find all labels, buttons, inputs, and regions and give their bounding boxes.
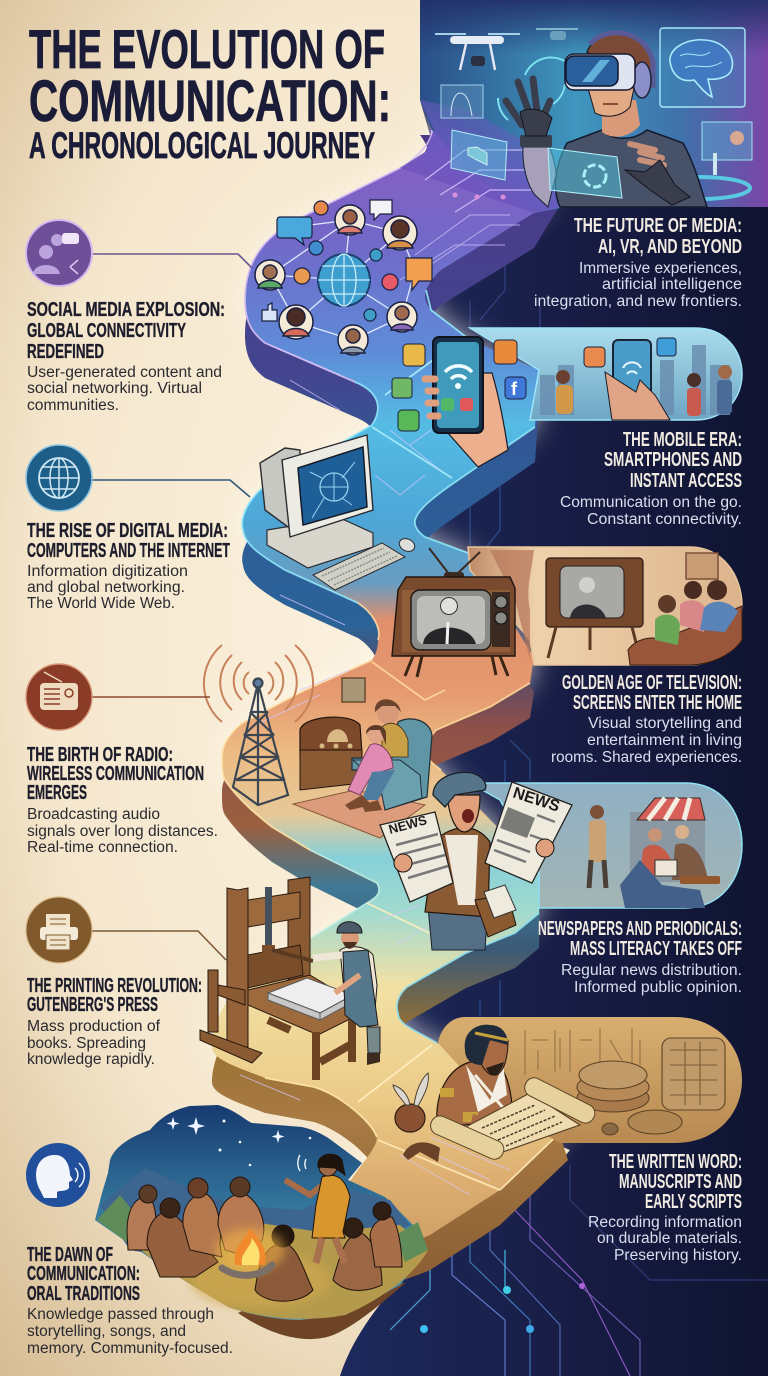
rug — [293, 790, 425, 838]
text: future of media — [534, 215, 742, 310]
ribbon side wall — [212, 135, 568, 1290]
text: birth of radio — [27, 744, 218, 856]
text: birth of radio: THE BIRTH OF RADIO: — [27, 744, 173, 766]
text: social media explosion: SOCIAL MEDIA EXPLOSION: — [27, 299, 225, 321]
chat bubbles — [262, 200, 432, 321]
text: dawn of communication: Knowledge passed through — [27, 1306, 214, 1323]
hologram panels — [441, 58, 752, 199]
app icons — [392, 340, 526, 431]
icon: social media — [26, 220, 92, 286]
left arm — [523, 147, 556, 207]
dark circuit background — [340, 0, 768, 1376]
keyboard — [313, 543, 405, 590]
text: social media explosion: REDEFINED — [27, 341, 104, 363]
text: written word: Preserving history. — [614, 1247, 742, 1264]
avatars — [255, 205, 417, 355]
text: mobile era: Constant connectivity. — [587, 511, 742, 528]
face — [447, 795, 480, 832]
panel: future of media VR scene — [400, 0, 768, 213]
sandy ground — [110, 1220, 428, 1319]
tablet and right hand — [548, 148, 622, 198]
curtain — [490, 550, 534, 660]
glove hand — [506, 79, 552, 136]
text: written word: on durable materials. — [597, 1230, 742, 1247]
text: social media explosion: GLOBAL CONNECTIVITY — [27, 320, 186, 342]
text: rise of digital media — [27, 520, 230, 612]
text: dawn of communication: ORAL TRADITIONS — [27, 1283, 140, 1305]
text: future of media: Immersive experiences, — [579, 260, 742, 277]
icon: globe — [318, 254, 370, 306]
icon: speaking head — [26, 1143, 90, 1207]
right newspaper — [485, 782, 572, 883]
mouse — [397, 536, 417, 554]
scene: printing press — [200, 877, 380, 1080]
desktop base — [267, 518, 373, 568]
neck and face — [602, 100, 640, 137]
press frame — [200, 877, 310, 1063]
text: printing revolution: THE PRINTING REVOLUTION: — [27, 975, 202, 997]
text: printing revolution: books. Spreading — [27, 1035, 146, 1052]
text: birth of radio: signals over long distances. — [27, 823, 218, 840]
monitor screen — [298, 447, 367, 525]
text: newspapers and periodicals: Regular news distribution. — [561, 962, 742, 979]
leader lines — [92, 254, 252, 960]
scribe figure — [437, 1025, 512, 1125]
hieroglyph wall — [525, 1028, 640, 1075]
retro television — [392, 548, 515, 677]
radio tower — [233, 678, 288, 805]
living-room TV — [546, 558, 643, 658]
circuit traces lower right — [390, 240, 768, 1376]
torso — [556, 130, 707, 207]
text: social media explosion: communities. — [27, 397, 119, 414]
fire — [215, 1228, 285, 1275]
text: birth of radio: Broadcasting audio — [27, 806, 160, 823]
ink pot and quill — [393, 1073, 440, 1162]
storyteller — [285, 1154, 350, 1263]
press screw and lever — [262, 887, 313, 961]
ribbon circuit marks — [240, 215, 520, 1195]
scene: radio tower and listeners — [204, 645, 432, 838]
icon: hologram brain — [660, 28, 745, 107]
text: rise of digital media: Information digitization — [27, 563, 188, 580]
second phone in hand — [605, 340, 670, 420]
radio wave arcs — [204, 645, 313, 722]
text: mobile era — [560, 429, 742, 528]
text: mobile era: Communication on the go. — [560, 494, 742, 511]
text: social media explosion: social networking. Virtual — [27, 380, 202, 397]
icon: radio — [26, 664, 92, 730]
icon: digital globe — [26, 445, 92, 511]
panel: mobile era scene — [392, 328, 742, 467]
winding ribbon timeline — [212, 100, 568, 1290]
text: future of media: integration, and new frontiers. — [534, 293, 742, 310]
satchel — [475, 895, 516, 937]
text: dawn of communication: storytelling, songs, and — [27, 1323, 186, 1340]
glowing ribbon edges — [222, 130, 568, 1190]
living-room capsule — [468, 547, 742, 665]
hands — [394, 854, 412, 872]
right newspaper: NEWS — [511, 785, 562, 816]
text: golden age of television — [551, 672, 742, 766]
framed picture — [342, 678, 365, 702]
text: rise of digital media: COMPUTERS AND THE INTERNET — [27, 540, 230, 562]
text: written word — [588, 1151, 742, 1264]
scene: desktop computer — [260, 435, 417, 590]
grass tufts — [97, 1195, 428, 1262]
app icons: f — [511, 379, 518, 399]
text: dawn of communication: memory. Community-focused. — [27, 1340, 233, 1357]
scene: dawn campfire — [95, 1105, 428, 1339]
icon: printer — [26, 897, 92, 963]
text: golden age of television: entertainment in living — [587, 732, 742, 749]
text: birth of radio: WIRELESS COMMUNICATION — [27, 763, 204, 785]
trousers — [428, 905, 488, 950]
panel: television scene — [392, 547, 742, 677]
newsboy — [380, 772, 572, 950]
hair — [587, 34, 653, 85]
street readers — [589, 805, 720, 908]
text: golden age of television: Visual storytelling and — [588, 715, 742, 732]
bubbles and bystanders — [556, 338, 732, 416]
text: social media explosion: User-generated content and — [27, 364, 222, 381]
papyrus scroll — [428, 1075, 598, 1162]
text: newspapers and periodicals: Informed public opinion. — [574, 979, 742, 996]
left newspaper: NEWS — [387, 812, 429, 837]
text: dawn of communication — [27, 1244, 233, 1357]
wooden radio cabinet — [300, 717, 362, 790]
text: written word: Recording information — [588, 1214, 742, 1231]
tan capsule — [438, 1017, 742, 1143]
armchair and family — [345, 699, 432, 812]
family on sofa — [628, 580, 742, 665]
headphones — [590, 33, 653, 88]
icon: drones — [435, 29, 578, 70]
title: THE EVOLUTION OF — [29, 18, 385, 80]
cap — [433, 772, 486, 807]
text: golden age of television: rooms. Shared experiences. — [551, 749, 742, 766]
text: dawn of communication: THE DAWN OF — [27, 1244, 113, 1266]
printer worker — [313, 922, 380, 1065]
city skyline — [540, 345, 730, 415]
CRT back housing — [260, 448, 300, 530]
mobile capsule — [470, 328, 742, 420]
stars — [166, 1117, 311, 1166]
text: printing revolution: Mass production of — [27, 1018, 161, 1035]
vest and shirt — [425, 828, 490, 917]
clay tablets — [577, 1038, 725, 1135]
figure: person in VR headset — [506, 33, 707, 207]
text: birth of radio: EMERGES — [27, 782, 87, 804]
text: birth of radio: Real-time connection. — [27, 839, 178, 856]
text: printing revolution — [27, 975, 202, 1068]
left newspaper — [380, 812, 453, 902]
title: A CHRONOLOGICAL JOURNEY — [29, 125, 375, 166]
panel: newspapers scene — [380, 772, 742, 950]
seated listeners — [127, 1177, 402, 1301]
soft glow around ribbon — [212, 100, 568, 1255]
VR background panel — [420, 0, 768, 213]
mountains — [100, 1168, 410, 1280]
text: rise of digital media: The World Wide Web. — [27, 595, 175, 612]
ribbon top surface — [212, 100, 568, 1255]
hand holding phone — [425, 337, 508, 467]
earth underside — [238, 1280, 405, 1339]
text: social media explosion — [27, 299, 225, 414]
shopfront and awning — [630, 798, 705, 882]
text: newspapers and periodicals — [538, 918, 742, 996]
text: rise of digital media: and global networking. — [27, 579, 185, 596]
panel: written word scene — [393, 1017, 742, 1162]
table with paper stack — [248, 975, 368, 1080]
scene: social network globe — [255, 200, 432, 355]
wall picture — [686, 553, 718, 579]
title: COMMUNICATION: — [29, 69, 391, 134]
title — [29, 18, 391, 166]
text: dawn of communication: COMMUNICATION: — [27, 1263, 140, 1285]
circuit traces on ribbon — [425, 150, 545, 212]
street capsule — [470, 783, 742, 908]
headset — [565, 54, 635, 90]
text: printing revolution: knowledge rapidly. — [27, 1051, 155, 1068]
text: rise of digital media: THE RISE OF DIGITAL MEDIA: — [27, 520, 228, 542]
text: future of media: artificial intelligence — [602, 276, 742, 293]
night sky cloud — [95, 1105, 428, 1320]
CRT monitor front — [282, 435, 373, 537]
text: printing revolution: GUTENBERG'S PRESS — [27, 994, 158, 1016]
network lines — [270, 220, 415, 340]
